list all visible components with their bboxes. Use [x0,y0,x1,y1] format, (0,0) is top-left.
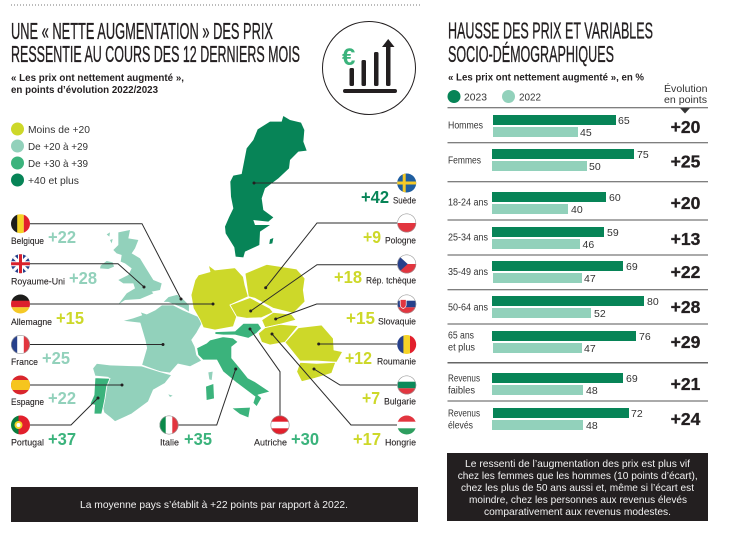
callout: key takeaway: moindre, chez les personnes aux revenus élevés [469,494,687,506]
row: 35-49 ans: 47 [584,273,596,285]
map: Belgium [163,294,189,312]
country: Hongrie [353,415,417,449]
row: Revenus élevés: 72 [631,408,643,420]
row: Revenus élevés: 48 [586,420,598,432]
country: Autriche: +30 [291,429,319,449]
country: France: France [11,357,38,368]
country: Belgique: +22 [48,227,76,247]
row: 35-49 ans: 35-49 ans [448,267,488,278]
country: France: +25 [42,348,70,368]
country: Pologne: +9 [363,227,381,247]
country: Suède: +42 [361,187,389,207]
country: Pologne [363,213,417,247]
country: Espagne [10,375,76,408]
row: Revenus faibles: 69 [626,373,638,385]
row: Revenus faibles: +21 [671,374,701,394]
legend: map colour scale: Moins de +20 [28,124,90,136]
icon: euro chart with rising arrow [322,22,416,114]
row: Hommes: 45 [580,127,592,139]
country: République tchèque: +18 [334,267,362,287]
callout: key takeaway: comparativement aux revenus modestes. [484,506,671,518]
row: 50-64 ans [448,296,701,320]
callout: key takeaway: chez les plus de 50 ans aussi et, même si l’écart est [461,482,694,494]
row: Femmes: 50 [589,161,601,173]
row: 25-34 ans: 46 [582,239,594,251]
column header: evolution in points: en points [664,94,707,106]
country: Royaume-Uni [10,254,97,288]
row: Revenus élevés [448,408,701,432]
country: Bulgarie [362,375,417,408]
callout: key takeaway [447,453,708,521]
legend: years: 2023 [464,92,487,104]
row: Revenus faibles: Revenus [448,374,480,385]
country: Autriche: Autriche [254,438,287,448]
row: 18-24 ans: +20 [671,193,701,213]
row: Revenus faibles: 48 [586,385,598,397]
country: Suède: Suède [393,196,416,206]
country: Roumanie [346,335,416,364]
row: 25-34 ans: +13 [671,229,701,249]
icon: euro chart with rising arrow: € [342,44,355,71]
row: 65 ans et plus: et plus [448,343,475,354]
country: Bulgarie: +7 [362,388,380,408]
map: Sweden [225,116,307,257]
row: 65 ans et plus: +29 [671,332,701,352]
callout: key takeaway: Le ressenti de l’augmentation des prix est plus vif [465,458,690,470]
column header: evolution in points: Évolution [664,82,708,95]
row: Femmes: 75 [637,149,649,161]
country: Portugal: +37 [48,429,76,449]
title: left panel: UNE « NETTE AUGMENTATION » DES PRIX [11,18,273,44]
row: 50-64 ans: 50-64 ans [448,303,488,314]
callout: country average: La moyenne pays s’établit à +22 points par rapport à 2022. [80,499,348,511]
leader lines [30,182,397,425]
country: Belgique [10,214,76,247]
country: Royaume-Uni: +28 [69,268,97,288]
row: Femmes: Femmes [448,156,481,167]
row: 35-49 ans [448,261,701,285]
legend: map colour scale: +40 et plus [28,175,79,187]
row: 50-64 ans: +28 [671,297,701,317]
country: Italie [160,416,212,446]
row: Hommes: +20 [671,117,701,137]
country: Allemagne: Allemagne [11,317,52,328]
row: 65 ans et plus [448,331,701,355]
row: 50-64 ans: 52 [594,308,606,320]
map: Italy mainland [197,337,270,407]
row: Hommes: Hommes [448,121,483,132]
map: United Kingdom and Belgium [100,230,162,304]
row: Hommes [448,115,701,139]
row: Revenus élevés: élevés [448,421,473,432]
country: Autriche [254,416,318,446]
map of Europe [90,116,343,422]
country: Pologne: Pologne [385,236,416,246]
row: Revenus faibles [448,373,701,397]
legend: map colour scale: De +20 à +29 [28,141,88,153]
country: Slovaquie: Slovaquie [378,316,416,328]
title: right panel [448,18,653,67]
country: Hongrie: +17 [353,429,381,449]
callout: country average [11,487,418,522]
country: Italie: Italie [160,438,179,448]
title: left panel [11,18,300,67]
country: Belgique: Belgique [11,236,44,247]
legend: map colour scale [11,122,90,187]
row: Hommes: 65 [618,115,630,127]
country: Allemagne [10,294,84,328]
legend: years [448,90,541,104]
callout: key takeaway: chez les femmes que les hommes (10 points d’écart), [458,470,698,482]
country: Hongrie: Hongrie [385,438,416,448]
country: Slovaquie [346,294,417,328]
column header: evolution in points [664,82,708,114]
row: 50-64 ans: 80 [647,296,659,308]
country: République tchèque [334,254,417,287]
country: Espagne: +22 [48,388,76,408]
row: 25-34 ans: 25-34 ans [448,233,488,244]
row: 65 ans et plus: 76 [639,331,651,343]
country: Italie: +35 [184,429,212,449]
map: central and eastern countries [191,264,343,382]
row: Femmes [448,149,701,173]
row: 25-34 ans [448,227,701,251]
country: Espagne: Espagne [11,397,44,408]
title: left panel: RESSENTIE AU COURS DES 12 DERNIERS MOIS [11,41,300,67]
row: 65 ans et plus: 65 ans [448,331,474,342]
row: Femmes: +25 [671,152,701,172]
country: Roumanie: +12 [345,348,372,368]
subtitle: left panel: « Les prix ont nettement augmenté », [11,73,184,84]
row: 18-24 ans: 18-24 ans [448,198,488,209]
legend: map colour scale: De +30 à +39 [28,158,88,170]
map: Iberia and islands [90,363,250,422]
country: Bulgarie: Bulgarie [384,396,416,408]
row: Revenus élevés: Revenus [448,409,480,420]
country: Suède [362,174,416,204]
country: Portugal [10,415,76,449]
row: 35-49 ans: +22 [671,262,701,282]
row: 18-24 ans: 60 [609,192,621,204]
country: Slovaquie: +15 [346,308,375,328]
map: France [122,305,203,373]
country: Roumanie: Roumanie [377,356,416,368]
legend: years: 2022 [519,92,541,104]
subtitle: right panel: « Les prix ont nettement augmenté », en % [448,72,644,84]
subtitle: left panel: en points d’évolution 2022/2023 [11,85,158,96]
row: 18-24 ans: 40 [571,204,583,216]
country: France [11,335,70,365]
country: République tchèque: Rép. tchèque [366,276,416,286]
country: Portugal: Portugal [11,438,44,448]
country: Royaume-Uni: Royaume-Uni [11,276,65,288]
row: 18-24 ans [448,192,701,216]
subtitle: left panel [11,73,184,96]
row: 35-49 ans: 69 [626,261,638,273]
row: 25-34 ans: 59 [607,227,619,239]
row: Revenus élevés: +24 [671,409,701,429]
bar chart: socio-demographic variables [448,108,708,432]
row: 65 ans et plus: 47 [584,343,596,355]
row: Revenus faibles: faibles [448,386,475,397]
country: Allemagne: +15 [56,308,84,328]
